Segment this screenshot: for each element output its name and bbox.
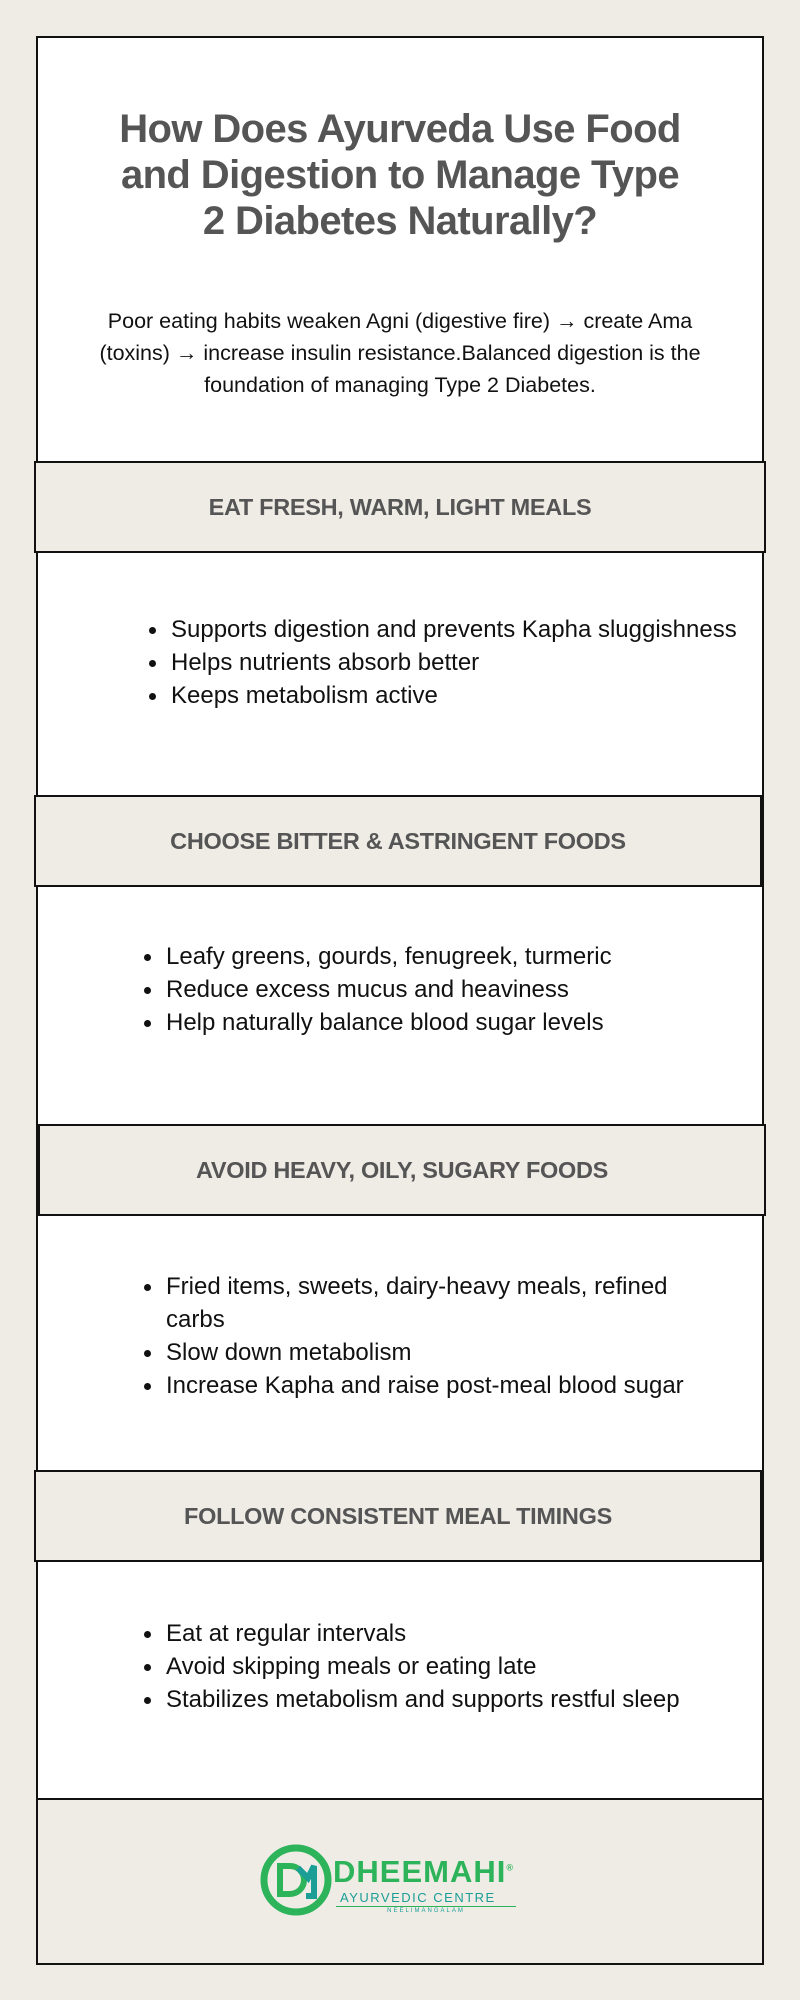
header: avoid: [38, 1124, 766, 1216]
list: avoid: Slow down metabolism: [166, 1339, 411, 1366]
header: avoid: AVOID HEAVY, OILY, SUGARY FOODS: [196, 1156, 608, 1182]
list: bitter: Reduce excess mucus and heaviness: [166, 976, 569, 1003]
logo: [260, 1844, 516, 1916]
location: [336, 1906, 516, 1914]
list: timings: [144, 1620, 680, 1713]
footer panel: [36, 1798, 764, 1965]
location: NEELIMANGALAM: [387, 1908, 465, 1914]
intro text: [99, 309, 701, 397]
brand name: DHEEMAHI®: [333, 1854, 514, 1889]
list: eat fresh: [149, 616, 737, 709]
header: timings: [34, 1470, 762, 1562]
title: [119, 107, 681, 243]
header: bitter: CHOOSE BITTER & ASTRINGENT FOODS: [170, 828, 626, 854]
list: eat fresh: Supports digestion and prevents Kapha sluggishness: [171, 616, 737, 643]
list: eat fresh: Keeps metabolism active: [171, 682, 438, 709]
intro text: Poor eating habits weaken Agni (digestive fire) → create Ama: [108, 309, 692, 333]
title: and Digestion to Manage Type: [121, 153, 679, 197]
list: timings: Avoid skipping meals or eating late: [166, 1653, 536, 1680]
list: bitter: Leafy greens, gourds, fenugreek, turmeric: [166, 943, 612, 970]
intro text: (toxins) → increase insulin resistance.Balanced digestion is the: [99, 341, 701, 365]
list: bitter: [144, 943, 612, 1036]
list: bitter: Help naturally balance blood sugar levels: [166, 1009, 604, 1036]
list: avoid: Fried items, sweets, dairy-heavy meals, refined carbs: [166, 1273, 668, 1333]
list: avoid: [144, 1273, 684, 1399]
title: How Does Ayurveda Use Food: [119, 107, 681, 151]
list: timings: Stabilizes metabolism and supports restful sleep: [166, 1686, 680, 1713]
header: timings: FOLLOW CONSISTENT MEAL TIMINGS: [184, 1502, 612, 1528]
icon: logo mark: [260, 1844, 332, 1916]
list: avoid: Increase Kapha and raise post-meal blood sugar: [166, 1372, 684, 1399]
list: timings: Eat at regular intervals: [166, 1620, 406, 1647]
header: bitter: [34, 795, 762, 887]
header: eat fresh: EAT FRESH, WARM, LIGHT MEALS: [209, 494, 591, 520]
intro text: foundation of managing Type 2 Diabetes.: [204, 373, 596, 397]
header: eat fresh: [34, 461, 766, 553]
subtitle: AYURVEDIC CENTRE: [340, 1890, 496, 1905]
title: 2 Diabetes Naturally?: [203, 199, 597, 243]
list: eat fresh: Helps nutrients absorb better: [171, 649, 479, 676]
